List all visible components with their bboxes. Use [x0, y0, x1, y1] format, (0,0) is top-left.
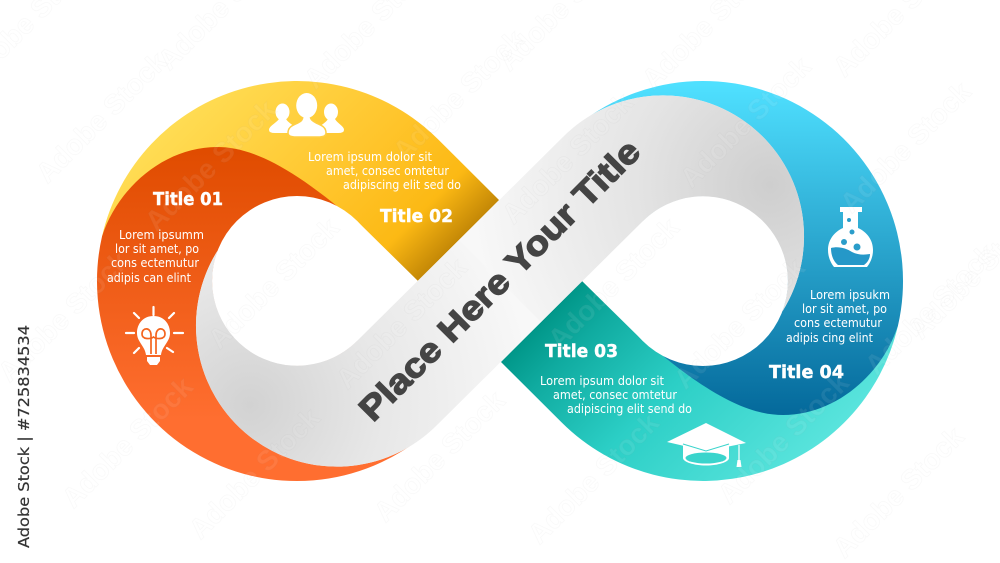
watermark pattern: Adobe Stock — [668, 252, 811, 395]
text block 03 — [540, 374, 692, 416]
left hole — [212, 196, 382, 366]
title 02: Title 02 — [380, 207, 453, 227]
text block 01: Lorem ipsumm — [119, 228, 204, 242]
panel: orange segment — [97, 147, 427, 481]
text block 04: cons ectemutur — [794, 316, 882, 330]
text block 03: amet, consec omtetur — [553, 388, 677, 402]
stock id caption: Adobe Stock | #725834534 — [15, 325, 33, 548]
watermark pattern: Adobe Stock — [827, 421, 970, 563]
panel: teal segment — [501, 281, 898, 481]
watermark pattern: Adobe Stock — [522, 407, 665, 550]
watermark pattern: Adobe Stock — [30, 46, 173, 189]
main title: Place Here Your Title — [352, 132, 648, 429]
watermark pattern: Adobe Stock — [368, 385, 511, 528]
title 04: Title 04 — [769, 363, 844, 383]
watermark pattern: Adobe Stock — [183, 402, 326, 545]
panel: yellow segment — [102, 81, 499, 281]
watermark pattern: Adobe Stock — [859, 238, 1000, 381]
watermark pattern: Adobe Stock — [330, 252, 473, 395]
text block 02 — [308, 150, 461, 192]
text block 04: adipis cing elint — [786, 331, 873, 345]
panel: blue segment — [573, 81, 903, 415]
watermark pattern: Adobe Stock — [496, 87, 639, 230]
icon: flask — [828, 207, 873, 267]
watermark pattern: Adobe Stock — [202, 212, 345, 355]
text block 02: Lorem ipsum dolor sit — [308, 150, 432, 164]
text block 02: adipiscing elit sed do — [343, 178, 461, 192]
text block 04: Lorem ipsukm — [810, 288, 890, 302]
watermark pattern: Adobe Stock — [834, 76, 977, 219]
watermark pattern: Adobe Stock — [56, 371, 199, 514]
text block 04: lor sit amet, po — [802, 302, 887, 316]
watermark pattern: Adobe Stock — [712, 367, 855, 510]
text block 04 — [786, 288, 890, 345]
right hole — [618, 196, 788, 366]
text block 03: Lorem ipsum dolor sit — [540, 374, 664, 388]
icon: people — [269, 93, 344, 137]
text block 03: adipiscing elit send do — [567, 402, 692, 416]
text block 01: cons ectemutur — [111, 256, 199, 270]
title 01: Title 01 — [153, 190, 223, 210]
text block 01 — [107, 228, 204, 285]
icon: light bulb — [126, 307, 183, 365]
watermark pattern: Adobe Stock — [674, 51, 817, 194]
panel: grey title ribbon — [196, 95, 804, 467]
watermark pattern: Adobe Stock — [139, 94, 282, 237]
text block 01: adipis can elint — [107, 271, 191, 285]
watermark pattern: Adobe Stock — [542, 212, 685, 355]
text block 02: amet, consec omtetur — [326, 164, 449, 178]
text block 01: lor sit amet, po — [115, 242, 199, 256]
icon: graduation cap — [667, 423, 746, 467]
title 03: Title 03 — [545, 342, 618, 362]
watermark pattern: Adobe Stock — [387, 24, 530, 167]
